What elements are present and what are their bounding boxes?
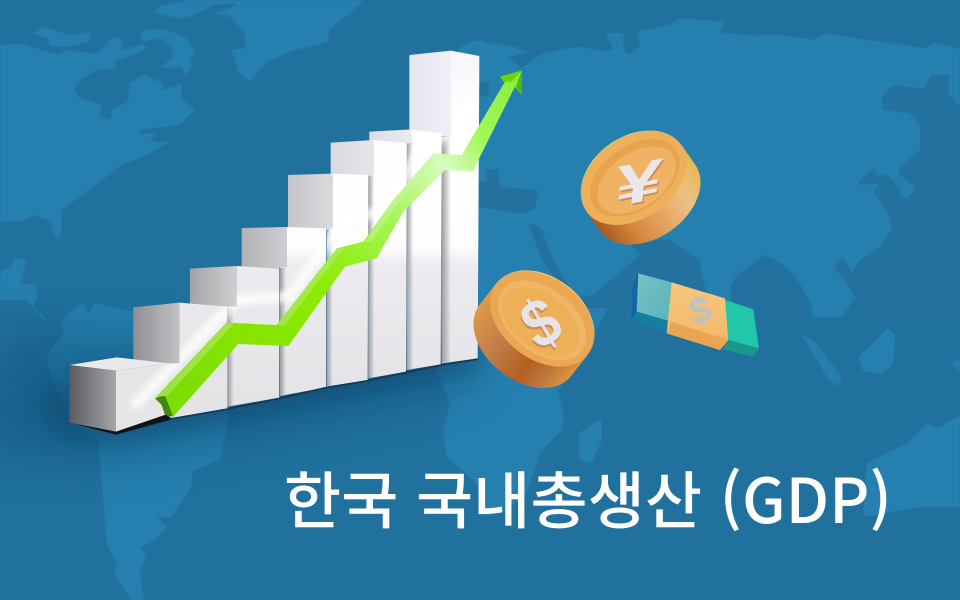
map: islands and australia <box>578 300 960 517</box>
dollar coin <box>455 250 614 408</box>
bar 1 <box>69 357 173 435</box>
yen coin <box>562 111 718 264</box>
bar 8 <box>409 51 479 363</box>
yen symbol: ¥ <box>613 147 665 220</box>
map: south america <box>27 300 230 600</box>
bar 2 <box>133 303 227 418</box>
chart contact shadow <box>40 340 480 440</box>
yen symbol: ¥ <box>614 148 666 222</box>
dollar symbol: $ <box>508 283 574 364</box>
bar 5 <box>288 174 368 387</box>
3D bar chart <box>69 51 522 435</box>
dollar symbol: $ <box>508 285 573 367</box>
money bundle <box>632 273 759 357</box>
bundle dollar symbol: $ <box>685 288 716 333</box>
bundle left teal end <box>632 273 672 332</box>
bundle paper band <box>667 282 728 350</box>
map: eurasia and africa <box>437 18 960 517</box>
chart wide soft shadow <box>0 330 480 462</box>
green growth arrow <box>155 71 522 417</box>
bar 6 <box>331 140 407 378</box>
glow behind arrow <box>133 60 493 407</box>
bundle right green end <box>723 300 759 357</box>
bar 7 <box>369 129 442 370</box>
bar 4 <box>242 227 326 396</box>
title: 한국 국내총생산 (GDP) <box>284 451 892 541</box>
bar base shadow line <box>169 358 478 420</box>
bar 3 <box>190 266 279 407</box>
map: americas <box>0 0 483 300</box>
